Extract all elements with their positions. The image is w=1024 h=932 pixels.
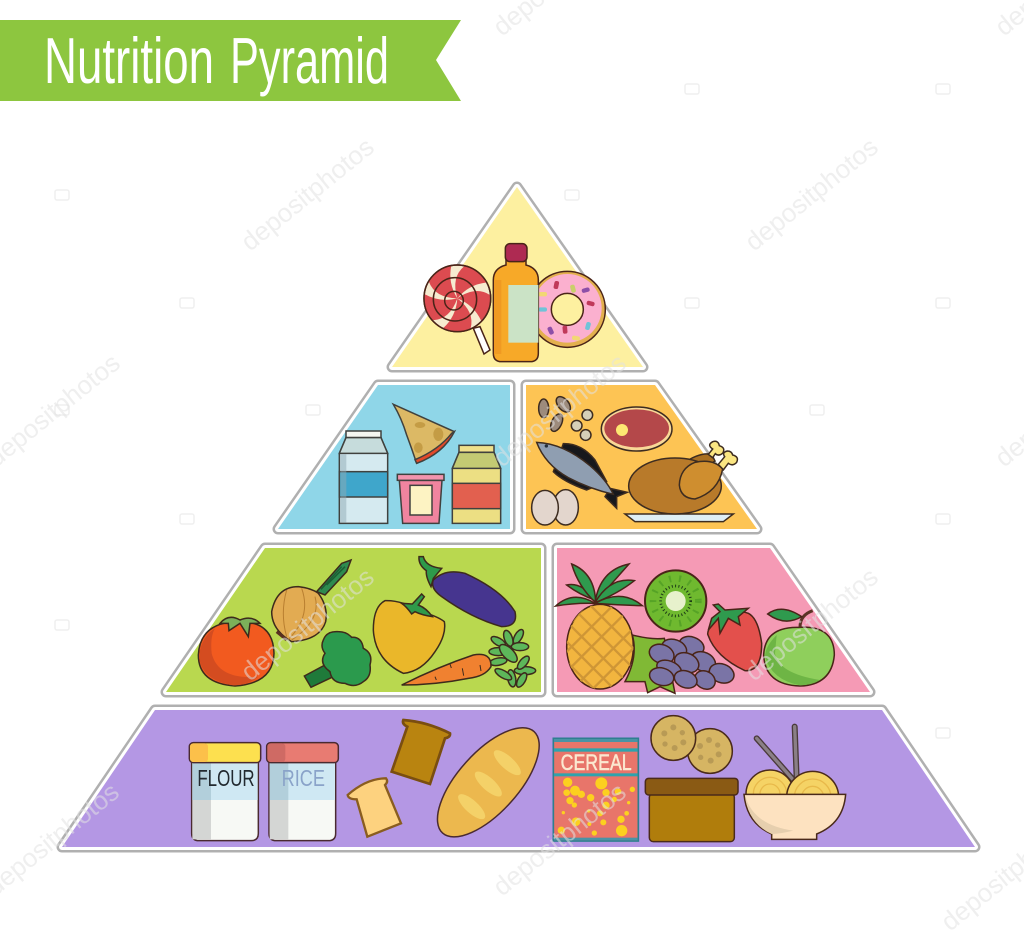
panel: protein tier: [526, 385, 757, 529]
panel: sweets and fats tier: [392, 187, 643, 367]
icon: jar: [452, 445, 501, 523]
icon: cookies: [651, 716, 732, 773]
icon: strawberry: [708, 604, 762, 671]
icon: yellow pepper: [373, 594, 445, 673]
title banner: [0, 20, 461, 101]
panel: dairy tier: [278, 385, 510, 529]
title text: Pyramid: [230, 24, 389, 97]
icon: onion: [272, 560, 351, 642]
icon: flour jar: [189, 743, 261, 841]
icon: tomato: [198, 617, 274, 686]
icon: grape leaf: [625, 635, 675, 693]
watermark text: depositphotos: [235, 561, 380, 687]
icon: syrup bottle: [493, 244, 538, 362]
icon: baguette: [420, 711, 556, 853]
icon: light bread slice: [348, 778, 401, 837]
icon: cereal box: [553, 738, 638, 841]
icon: brown box: [645, 778, 738, 842]
icon: flour jar: FLOUR: [197, 765, 255, 791]
icon: pineapple: [553, 562, 644, 690]
icon: rice jar: RICE: [282, 765, 325, 791]
icon: yogurt cup: [397, 474, 444, 523]
icon: fish: [537, 442, 627, 508]
watermark text: depositphotos: [487, 347, 632, 473]
watermark text: depositphotos: [235, 131, 380, 257]
icon: carrot greens: [489, 628, 536, 689]
icon: carrot: [402, 654, 491, 685]
title text: Nutrition: [44, 24, 214, 97]
icon: steak: [601, 407, 672, 451]
icon: rice jar: [267, 743, 338, 841]
icon: noodle bowl: [744, 727, 846, 839]
icon: cereal box: CEREAL: [561, 750, 632, 775]
watermark camera marks: [55, 84, 950, 740]
icon: dark bread slice: [392, 720, 450, 784]
icon: donut: [529, 271, 605, 347]
icon: lollipop: [417, 261, 491, 354]
icon: eggs: [532, 490, 578, 525]
icon: beans: [539, 394, 593, 440]
icon: green apple: [764, 609, 834, 686]
watermark text: depositphotos: [487, 776, 632, 902]
watermark text: depositphotos: [739, 561, 884, 687]
icon: roast chicken: [625, 441, 737, 522]
icon: grapes: [647, 633, 737, 693]
watermark text: depositphotos: [739, 131, 884, 257]
icon: milk carton: [339, 431, 388, 523]
icon: broccoli: [304, 632, 371, 687]
icon: cheese wedge: [393, 404, 454, 463]
panel: grains tier: [62, 710, 975, 853]
panel: vegetables tier: [166, 548, 541, 692]
icon: eggplant: [419, 557, 516, 627]
icon: kiwi: [645, 570, 706, 632]
panel: fruit tier: [545, 548, 870, 700]
